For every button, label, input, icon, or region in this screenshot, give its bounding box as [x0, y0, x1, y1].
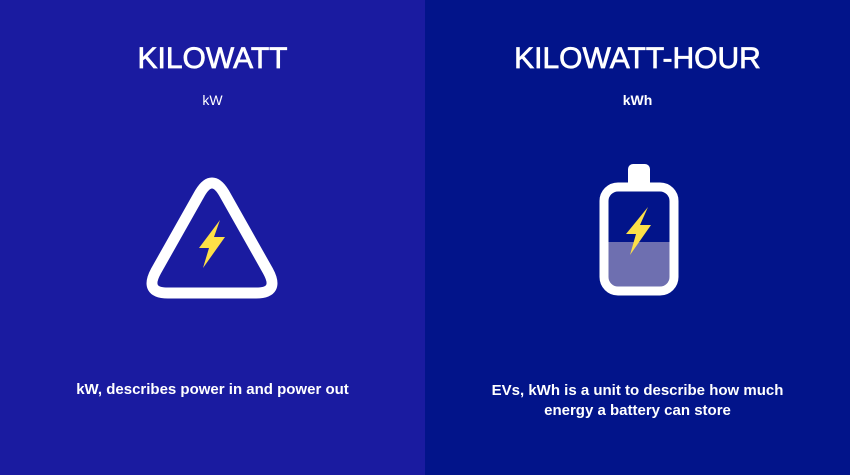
title: kilowatt-hour: KILOWATT-HOUR: [514, 42, 761, 75]
text: kWh description: [492, 382, 783, 419]
icon: battery with bolt: [600, 164, 678, 296]
icon: triangle with bolt: [146, 178, 278, 298]
panel: kilowatt: [0, 0, 425, 475]
subtitle: kW: kW: [202, 92, 223, 108]
text: kWh description: energy a battery can store: [544, 402, 731, 419]
subtitle: kWh: kWh: [623, 92, 652, 108]
text: kWh description: EVs, kWh is a unit to describe how much: [492, 382, 783, 399]
text: kW description: kW, describes power in and power out: [76, 381, 349, 398]
panel: kilowatt-hour: [425, 0, 850, 475]
title: kilowatt: KILOWATT: [138, 42, 288, 75]
